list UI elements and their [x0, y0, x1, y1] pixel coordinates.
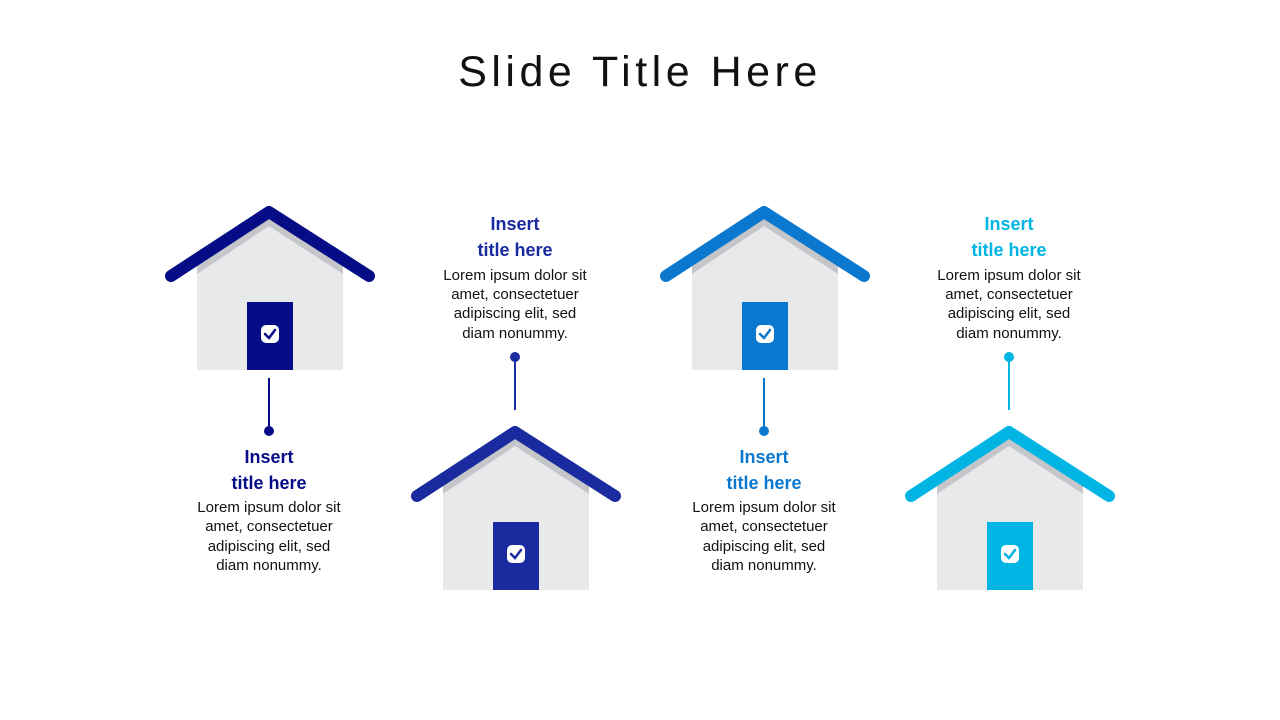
text 3: amet, consectetuer: [700, 518, 828, 535]
connector 2: [510, 352, 520, 410]
text 3: title here: [726, 473, 802, 493]
text 2: Lorem ipsum dolor sit: [443, 267, 588, 284]
text 1: amet, consectetuer: [205, 518, 333, 535]
connector 4: [1004, 352, 1014, 410]
text 1: adipiscing elit, sed: [208, 538, 330, 555]
text 2: title here: [477, 240, 553, 260]
connector 3: [759, 378, 769, 436]
house 3: [666, 212, 864, 370]
text 4: Insert: [984, 214, 1034, 234]
text 4: amet, consectetuer: [945, 286, 1073, 303]
text 2: adipiscing elit, sed: [454, 305, 576, 322]
text 3: adipiscing elit, sed: [703, 538, 825, 555]
text 1: title here: [231, 473, 307, 493]
text 4: adipiscing elit, sed: [948, 305, 1070, 322]
text 2: [443, 214, 588, 342]
text 4: Lorem ipsum dolor sit: [937, 267, 1082, 284]
text 4: diam nonummy.: [956, 325, 1062, 342]
text 1: Lorem ipsum dolor sit: [197, 499, 342, 516]
text 4: title here: [971, 240, 1047, 260]
text 2: Insert: [490, 214, 540, 234]
text 2: diam nonummy.: [462, 325, 568, 342]
text 3: diam nonummy.: [711, 557, 817, 574]
text 3: Insert: [739, 447, 789, 467]
connector 1: [264, 378, 274, 436]
text 1: Insert: [244, 447, 294, 467]
text 3: Lorem ipsum dolor sit: [692, 499, 837, 516]
text 1: diam nonummy.: [216, 557, 322, 574]
text 3: [692, 447, 837, 574]
house 2: [417, 432, 615, 590]
text 1: [197, 447, 342, 574]
house 1: [171, 212, 369, 370]
text 2: amet, consectetuer: [451, 286, 579, 303]
text 4: [937, 214, 1082, 342]
title: Slide Title Here: [458, 48, 822, 96]
house 4: [911, 432, 1109, 590]
